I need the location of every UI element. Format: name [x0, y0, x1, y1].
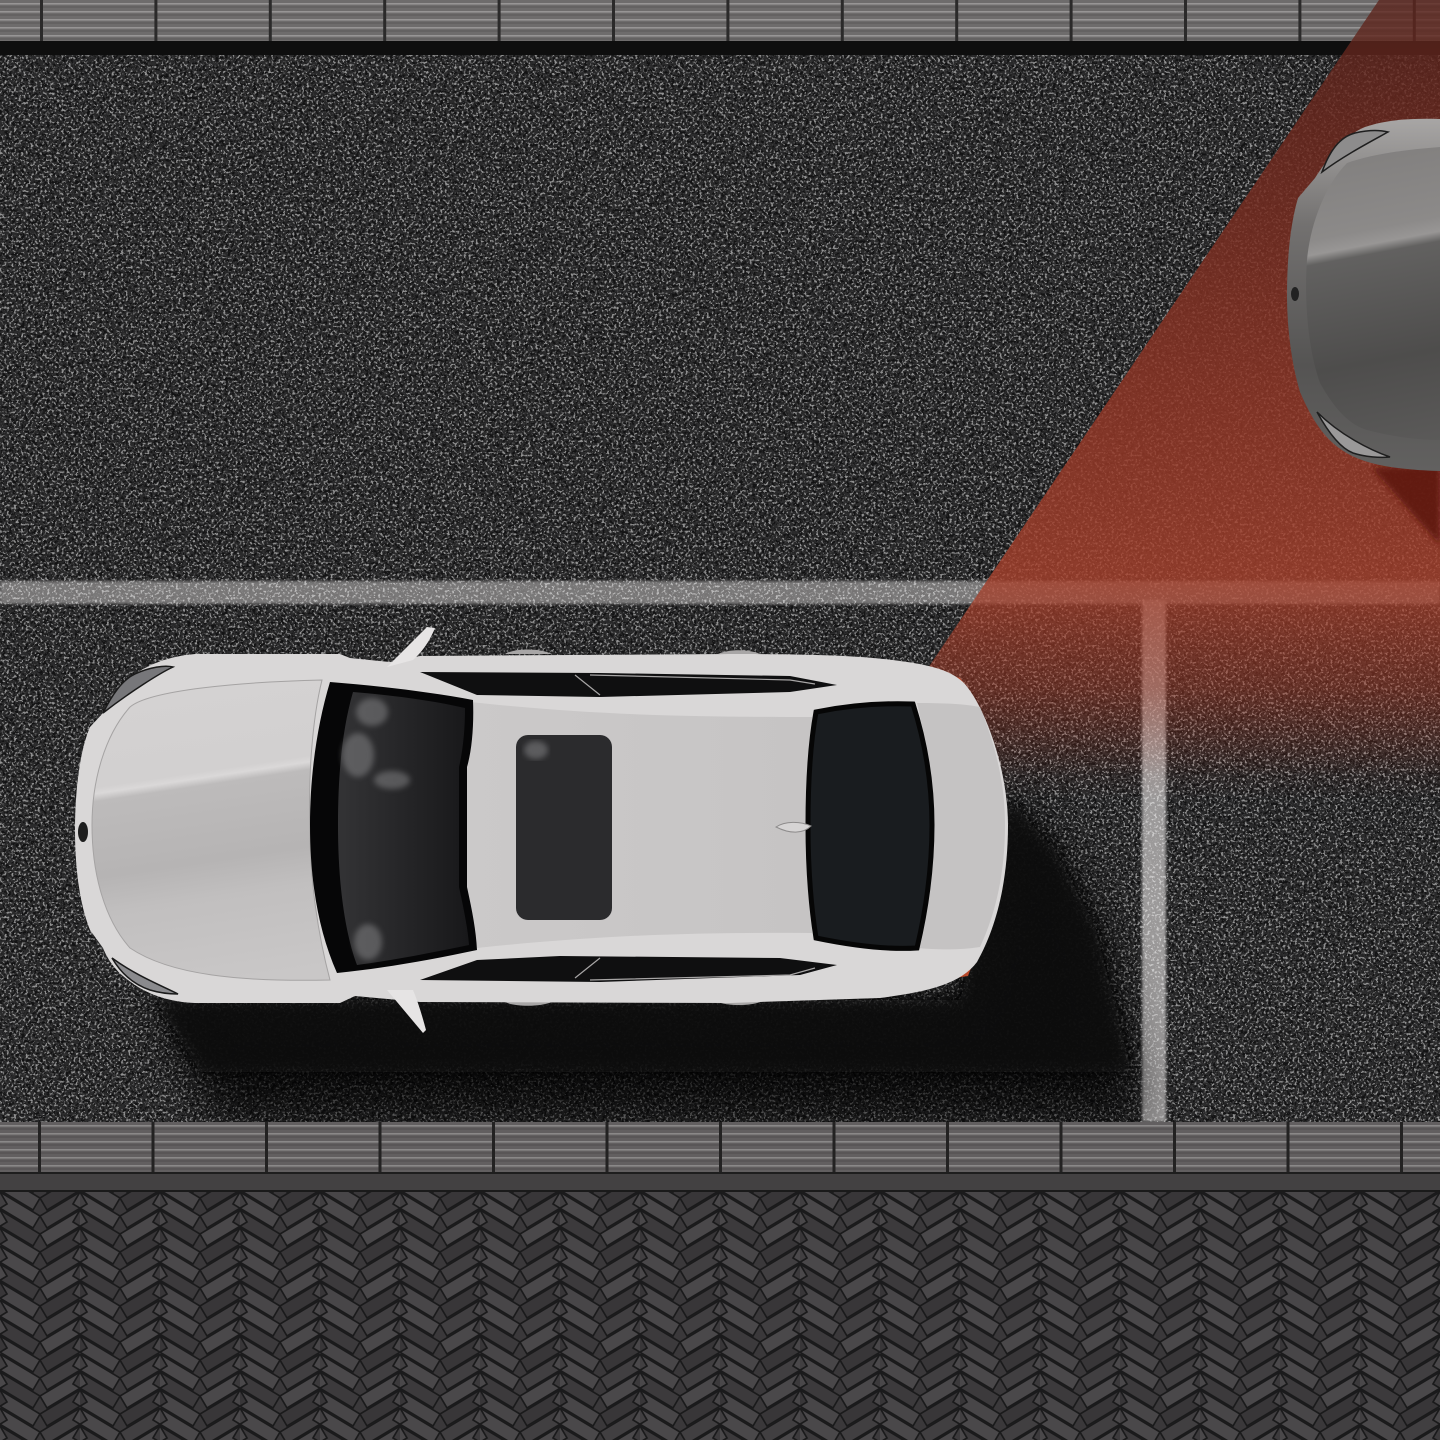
horizontal white lane line — [0, 581, 1440, 604]
upper mirror — [387, 627, 435, 667]
vertical white parking line — [1142, 600, 1166, 1122]
other car hood — [1306, 147, 1440, 440]
other car lower headlight — [1317, 412, 1390, 457]
lower headlight — [112, 958, 178, 994]
upper headlight — [103, 666, 173, 713]
door handle bumps — [505, 650, 760, 1006]
rear window — [808, 704, 932, 948]
lower paving curb — [0, 1122, 1440, 1192]
other car upper headlight — [1322, 131, 1388, 172]
other car shadow — [1372, 465, 1440, 545]
sky cloud reflection — [342, 698, 410, 960]
roof — [467, 702, 812, 948]
roof antenna — [776, 822, 811, 832]
other car at right, inside detection zone — [1287, 119, 1440, 545]
trunk lid — [917, 703, 1005, 949]
other car badge — [1291, 287, 1299, 301]
windshield frame — [310, 682, 477, 973]
upper side windows — [420, 672, 837, 697]
main white car, top view — [75, 627, 1008, 1033]
rear light marks — [925, 668, 978, 982]
lower side windows — [420, 956, 837, 982]
windshield glass — [338, 692, 469, 965]
herringbone brick pavement — [0, 1192, 1440, 1440]
car body — [75, 654, 1008, 1003]
asphalt light speckle — [0, 50, 1440, 1125]
hood — [92, 680, 330, 980]
sunroof — [516, 735, 612, 920]
asphalt road surface — [0, 50, 1440, 1125]
red rear sensor detection zone — [928, 0, 1440, 800]
other car body — [1287, 119, 1440, 471]
top paving curb — [0, 0, 1440, 55]
front badge — [78, 822, 88, 842]
car shadow on ground — [150, 795, 1145, 1120]
lower mirror — [387, 990, 426, 1033]
